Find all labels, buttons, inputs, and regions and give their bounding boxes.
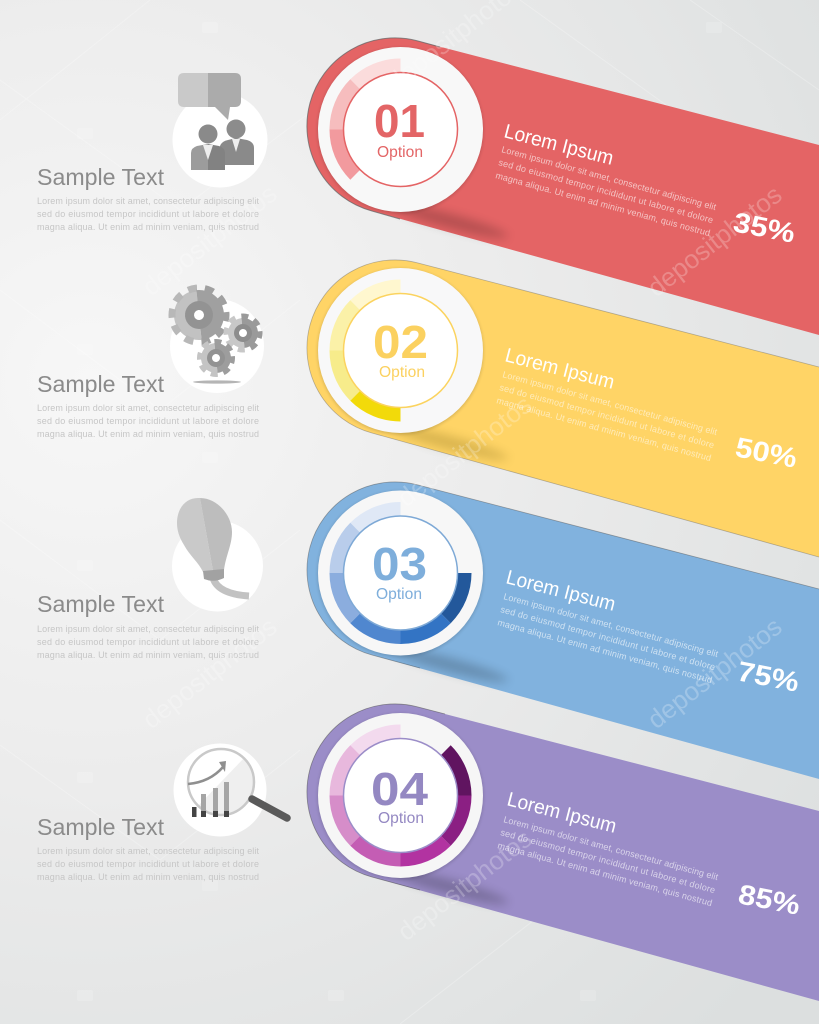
band text 02: sed do eiusmod tempor incididunt ut labore et dolore: [498, 382, 715, 450]
percentage 35%: 35%: [731, 206, 798, 249]
option label 04: Option: [378, 810, 424, 827]
heading: Sample Text 2: Sample Text: [37, 371, 165, 397]
text block 3: Lorem ipsum dolor sit amet, consectetur adipiscing elit: [37, 624, 259, 634]
band text 03: [496, 567, 720, 685]
text block 1: Lorem ipsum dolor sit amet, consectetur adipiscing elit: [37, 196, 259, 206]
option label 01: Option: [377, 144, 423, 161]
number 04: 04: [371, 763, 428, 815]
option label 02: Option: [379, 364, 425, 381]
band text 03: Lorem Ipsum: [504, 567, 618, 616]
band text 03: Lorem ipsum dolor sit amet, consectetur adipiscing elit: [502, 591, 720, 659]
band text 02: Lorem Ipsum: [503, 345, 617, 394]
number 03: 03: [372, 538, 427, 590]
band text 02: magna aliqua. Ut enim ad minim veniam, quis nostrud: [495, 395, 712, 463]
text block 3: magna aliqua. Ut enim ad minim veniam, quis nostrud: [37, 650, 259, 660]
progress dial 04: [318, 713, 484, 880]
band text 01: Lorem ipsum dolor sit amet, consectetur adipiscing elit: [500, 144, 718, 212]
heading: Sample Text 1: Sample Text: [37, 164, 165, 190]
band text 04: magna aliqua. Ut enim ad minim veniam, quis nostrud: [496, 840, 713, 908]
watermark text: depositphotos: [136, 178, 282, 302]
panel: red band 01: [307, 38, 819, 335]
text block 3: sed do eiusmod tempor incididunt ut labore et dolore: [37, 637, 259, 647]
text block 2: [37, 403, 259, 439]
band text 01: Lorem Ipsum: [502, 121, 616, 170]
band text 01: magna aliqua. Ut enim ad minim veniam, quis nostrud: [494, 170, 711, 238]
text block 1: [37, 196, 259, 232]
text block 4: magna aliqua. Ut enim ad minim veniam, quis nostrud: [37, 872, 259, 882]
watermark text: depositphotos: [391, 823, 537, 947]
band text 04: Lorem Ipsum: [505, 789, 619, 838]
text block 2: sed do eiusmod tempor incididunt ut labore et dolore: [37, 416, 259, 426]
watermark text: [136, 0, 787, 947]
icon: magnifier with chart: [174, 744, 287, 836]
icon: two people with speech bubble: [172, 73, 268, 188]
text block 1: magna aliqua. Ut enim ad minim veniam, quis nostrud: [37, 222, 259, 232]
option label 03: Option: [376, 586, 422, 603]
progress dial 03: [318, 490, 484, 657]
heading: Sample Text 3: Sample Text: [37, 591, 165, 617]
percentage 50%: 50%: [733, 431, 800, 474]
left item 2: icon and text: [37, 285, 264, 439]
panel: purple band 04: [307, 704, 819, 1001]
text block 4: sed do eiusmod tempor incididunt ut labore et dolore: [37, 859, 259, 869]
text block 2: Lorem ipsum dolor sit amet, consectetur adipiscing elit: [37, 403, 259, 413]
left item 4: icon and text: [37, 744, 287, 882]
text block 2: magna aliqua. Ut enim ad minim veniam, quis nostrud: [37, 429, 259, 439]
band text 04: sed do eiusmod tempor incididunt ut labore et dolore: [499, 827, 716, 895]
left item 3: icon and text: [37, 498, 263, 660]
text block 4: Lorem ipsum dolor sit amet, consectetur adipiscing elit: [37, 846, 259, 856]
text block 4: [37, 846, 259, 882]
band text 02: [495, 345, 719, 463]
panel: blue band 03: [307, 482, 819, 779]
text block 1: sed do eiusmod tempor incididunt ut labore et dolore: [37, 209, 259, 219]
icon: gears: [169, 285, 264, 393]
band text 02: Lorem ipsum dolor sit amet, consectetur adipiscing elit: [501, 369, 719, 437]
watermark text: depositphotos: [391, 389, 537, 513]
icon: light bulb: [172, 498, 263, 612]
band text 04: Lorem ipsum dolor sit amet, consectetur adipiscing elit: [502, 814, 720, 882]
progress dial 02: [318, 268, 484, 434]
band text 03: magna aliqua. Ut enim ad minim veniam, quis nostrud: [496, 617, 713, 685]
progress dial 01: [318, 47, 484, 214]
panel: yellow band 02: [307, 260, 819, 557]
band text 01: [494, 121, 718, 238]
watermark text: depositphotos: [136, 611, 282, 735]
left item 1: icon and text: [37, 73, 268, 232]
number 02: 02: [373, 316, 428, 368]
heading: Sample Text 4: Sample Text: [37, 814, 165, 840]
band text 01: sed do eiusmod tempor incididunt ut labore et dolore: [497, 157, 714, 225]
watermark text: depositphotos: [641, 611, 787, 735]
percentage 85%: 85%: [736, 878, 803, 921]
watermark text: depositphotos: [641, 179, 787, 303]
text block 3: [37, 624, 259, 660]
percentage 75%: 75%: [735, 655, 802, 698]
number 01: 01: [374, 95, 425, 147]
band text 03: sed do eiusmod tempor incididunt ut labore et dolore: [499, 604, 716, 672]
band text 04: [496, 789, 720, 908]
